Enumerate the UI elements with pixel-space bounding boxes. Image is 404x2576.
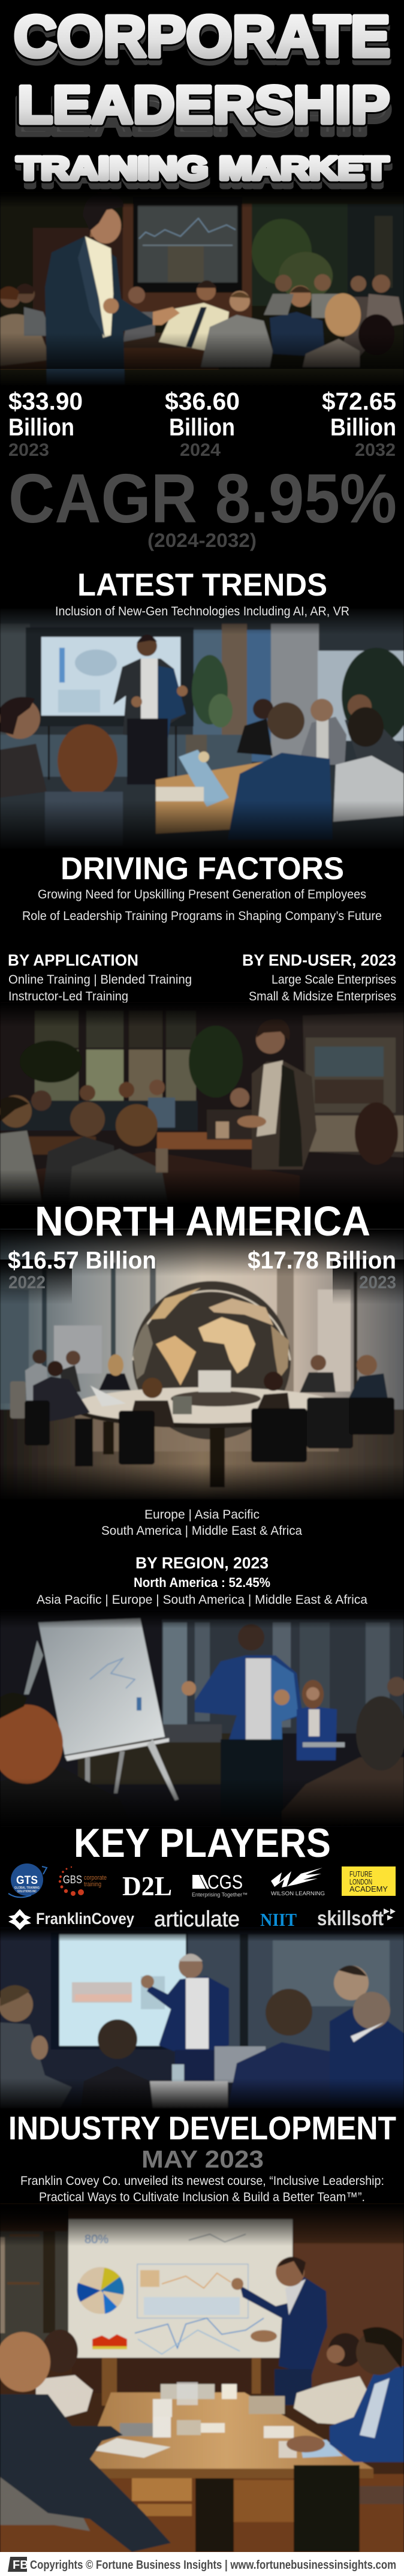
market value 2032: 2032 <box>355 440 396 460</box>
seated team <box>0 695 404 846</box>
title: Corporate Leadership Training Market: TRAINING MARKET <box>17 151 388 187</box>
trend text: Inclusion of New-Gen Technologies Including AI, AR, VR <box>55 605 349 618</box>
title: Corporate Leadership Training Market: LEADERSHIP <box>17 75 390 134</box>
presenter figure <box>141 1954 229 2087</box>
market value 2032: Billion <box>330 413 396 441</box>
by region breakdown: Asia Pacific | Europe | South America | Middle East & Africa <box>37 1593 367 1607</box>
heading: driving factors: DRIVING FACTORS <box>61 851 344 886</box>
logo: skillsoft: skillsoft <box>317 1907 384 1930</box>
presenter figure <box>237 1019 316 1170</box>
segment: by application <box>8 951 192 1003</box>
floor <box>0 2474 404 2555</box>
seated woman <box>297 1680 345 1760</box>
logo: Future London Academy: LONDON <box>349 1877 372 1886</box>
logo row: top <box>8 1863 396 1901</box>
logo: CGS: CGS <box>207 1871 243 1893</box>
title: Corporate Leadership Training Market: TRAINING MARKET <box>17 151 388 187</box>
title: Corporate Leadership Training Market <box>14 4 391 194</box>
seated audience right <box>123 274 404 367</box>
logo: CGS <box>192 1871 248 1898</box>
logo: GTS <box>8 1863 47 1897</box>
conference table <box>74 1370 338 1487</box>
north america value 2022: $16.57 Billion <box>8 1246 156 1274</box>
footer: copyright bar <box>0 2552 404 2576</box>
logo: GBS corporate training: corporate <box>84 1874 107 1881</box>
title: Corporate Leadership Training Market: LEADERSHIP <box>14 86 391 146</box>
segment: by end-user: Large Scale Enterprises <box>272 973 396 987</box>
logo: NIIT: NIIT <box>260 1909 297 1930</box>
icon: Fortune Business Insights logo: FB <box>13 2559 29 2572</box>
logo: GTS: GTS <box>16 1874 38 1887</box>
market value 2024: 2024 <box>180 440 221 460</box>
whiteboard <box>26 627 194 780</box>
logo: FranklinCovey <box>8 1909 134 1930</box>
by region breakdown: BY REGION, 2023 <box>135 1554 269 1572</box>
segment: by end-user: BY END-USER, 2023 <box>242 951 396 969</box>
presenter figure <box>182 1624 303 1817</box>
driving factors text: Role of Leadership Training Programs in Shaping Company’s Future <box>22 909 382 923</box>
logo: Wilson Learning: WILSON LEARNING <box>271 1890 325 1897</box>
driving factors text <box>22 888 382 923</box>
logo: GTS: SOLUTIONS INC <box>17 1890 37 1893</box>
logo: GBS corporate training: GBS <box>63 1874 82 1886</box>
flip chart <box>24 1618 179 1801</box>
logo: Future London Academy <box>342 1866 396 1896</box>
development description: Franklin Covey Co. unveiled its newest course, “Inclusive Leadership: <box>20 2174 384 2188</box>
whiteboard with charts: 80% <box>85 2233 108 2246</box>
photo: speaker presenting to seated audience <box>0 193 404 387</box>
photo: boardroom with glass globe <box>0 1230 404 1502</box>
photo: presenter in blue suit at flip chart <box>0 1610 404 1826</box>
other regions list: South America | Middle East & Africa <box>101 1524 302 1538</box>
presenter figure <box>231 2257 327 2405</box>
logo: GBS corporate training <box>59 1866 107 1896</box>
segment: by end-user: Small & Midsize Enterprises <box>249 990 396 1003</box>
boardroom table <box>80 2382 373 2552</box>
speaker figure <box>45 193 180 385</box>
market value 2024: $36.60 <box>165 387 240 415</box>
north america value 2023 <box>248 1246 396 1292</box>
foreground audience <box>0 1677 404 1826</box>
north america value 2023: 2023 <box>359 1273 396 1292</box>
market value 2032 <box>322 387 396 460</box>
presentation screen <box>303 1012 404 1158</box>
market value 2032: $72.65 <box>322 387 396 415</box>
logo: GTS: GLOBAL TRAINING <box>14 1886 40 1890</box>
segment: by application: BY APPLICATION <box>8 951 138 969</box>
logo: D2L: D2L <box>122 1871 172 1901</box>
heading: key players: KEY PLAYERS <box>74 1820 331 1866</box>
title: Corporate Leadership Training Market: CORPORATE <box>14 4 390 69</box>
CAGR figure: (2024-2032) <box>147 530 257 551</box>
whiteboard with charts <box>68 2219 293 2358</box>
heading: north america: NORTH AMERICA <box>35 1198 370 1245</box>
photo: presenter with dark window room <box>0 1003 404 1204</box>
north america value 2023: $17.78 Billion <box>248 1246 396 1274</box>
market value 2023: 2023 <box>8 440 49 460</box>
central plant <box>186 655 233 765</box>
presenter figure <box>113 635 188 784</box>
seated people <box>0 1080 252 1204</box>
people around the table <box>10 1349 394 1466</box>
logo: Future London Academy: ACADEMY <box>349 1884 388 1893</box>
by region breakdown: North America : 52.45% <box>134 1575 270 1590</box>
globe <box>132 1281 291 1439</box>
north america value 2022 <box>8 1246 156 1292</box>
title: Corporate Leadership Training Market: LEADERSHIP <box>17 75 390 134</box>
driving factors text: Growing Need for Upskilling Present Generation of Employees <box>38 888 366 901</box>
projected chart screen <box>51 1932 188 2049</box>
title: Corporate Leadership Training Market: CORPORATE <box>14 10 391 75</box>
market value 2023 <box>8 387 83 460</box>
seated women left <box>0 2329 171 2552</box>
photo: presenter with chart screen and team <box>0 1928 404 2111</box>
logo: Future London Academy: FUTURE <box>349 1869 372 1878</box>
photo: presenter pointing at whiteboard with boardroom table <box>0 2204 404 2555</box>
tables <box>157 1132 253 1149</box>
logo row: bottom <box>8 1907 396 1931</box>
right plant <box>342 648 404 744</box>
other regions list <box>101 1508 302 1538</box>
market value 2024: Billion <box>169 413 235 441</box>
table <box>156 762 312 834</box>
logo: Wilson Learning <box>271 1868 325 1897</box>
title: Corporate Leadership Training Market: CORPORATE <box>14 4 390 69</box>
market value 2023: $33.90 <box>8 387 83 415</box>
icon: Fortune Business Insights logo <box>8 2557 29 2572</box>
logo: articulate: articulate <box>154 1907 240 1931</box>
segment: by end-user <box>242 951 396 1003</box>
segment: by application: Instructor-Led Training <box>8 990 128 1003</box>
segment: by application: Online Training | Blended Training <box>8 973 192 987</box>
development description: Practical Ways to Cultivate Inclusion & Build a Better Team™”. <box>39 2190 365 2204</box>
other regions list: Europe | Asia Pacific <box>144 1508 260 1522</box>
logo: FranklinCovey: FranklinCovey <box>36 1910 134 1928</box>
logo: GBS corporate training: training <box>84 1881 101 1888</box>
market value 2024 <box>165 387 240 460</box>
photo: presenter at whiteboard with team at table <box>0 606 404 852</box>
heading: latest trends: LATEST TRENDS <box>77 567 327 603</box>
market value 2023: Billion <box>8 413 74 441</box>
by region breakdown <box>37 1554 367 1607</box>
title: Corporate Leadership Training Market: TRAINING MARKET <box>18 158 390 194</box>
logo: CGS: Enterprising Together™ <box>192 1892 248 1898</box>
seated team <box>0 1965 404 2108</box>
development description <box>20 2174 384 2204</box>
seated audience left <box>0 284 53 366</box>
seated people right <box>287 2327 404 2552</box>
north america value 2022: 2022 <box>8 1273 46 1292</box>
date: May 2023: MAY 2023 <box>141 2145 264 2173</box>
